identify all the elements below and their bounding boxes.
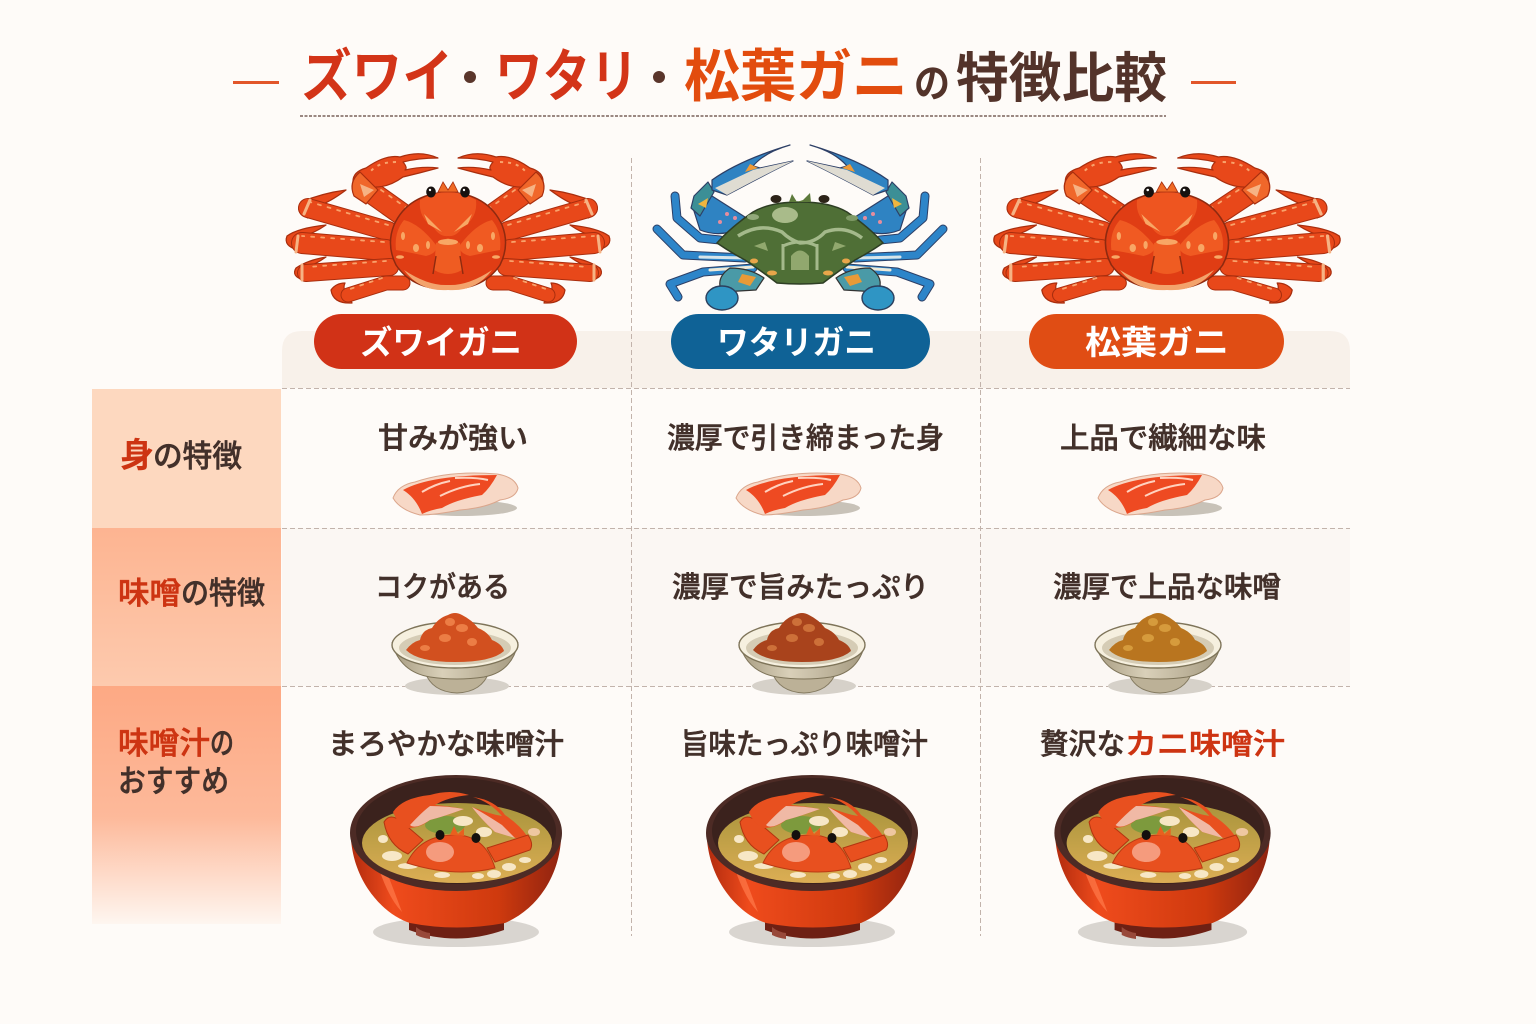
title dot 2 — [653, 71, 665, 83]
row header: miso: の特徴 — [181, 576, 265, 611]
icon: crab meat watari — [736, 473, 861, 516]
cell text: meat zuwai: 甘みが強い — [378, 422, 528, 455]
title word: watari: ワタリ — [495, 45, 638, 109]
title word: comparison: 特徴比較 — [956, 49, 1167, 109]
row header: meat: 身 — [120, 437, 154, 475]
cell text: soup zuwai: まろやかな味噌汁 — [328, 728, 564, 761]
icon: crab meat zuwai — [393, 473, 518, 516]
icon: miso dish zuwai — [392, 613, 518, 695]
cell text: miso matsuba: 濃厚で上品な味噌 — [1053, 571, 1281, 604]
row header: miso soup: の — [210, 726, 234, 761]
cell text: miso watari: 濃厚で旨みたっぷり — [672, 571, 929, 604]
name pill: matsuba — [1029, 314, 1284, 369]
icon: crab meat matsuba — [1098, 473, 1223, 516]
cell text: meat watari: 濃厚で引き締まった身 — [667, 422, 944, 455]
row header: miso soup: おすすめ — [118, 764, 229, 799]
icon: crab miso soup bowl zuwai — [350, 775, 562, 947]
title dot 1 — [464, 71, 476, 83]
dividers — [282, 158, 1350, 936]
row band: miso — [282, 528, 1350, 686]
name pill: watari — [671, 314, 930, 369]
icon: matsuba crab — [994, 154, 1340, 303]
row header: meat — [92, 389, 281, 528]
name pill: zuwai — [314, 314, 577, 369]
cell text: miso zuwai: コクがある — [375, 571, 510, 604]
icon: miso dish matsuba — [1095, 613, 1221, 695]
icon: crab miso soup bowl watari — [706, 775, 918, 947]
title underline — [300, 115, 1166, 117]
name pill: matsuba: 松葉ガニ — [1085, 324, 1229, 361]
icon: crab miso soup bowl matsuba — [1054, 775, 1271, 947]
cell text: soup watari: 旨味たっぷり味噌汁 — [681, 728, 928, 761]
row header: miso: 味噌 — [118, 576, 181, 611]
title word: zuwai: ズワイ — [301, 45, 453, 109]
icon: miso dish watari — [739, 613, 865, 695]
row header: meat: の特徴 — [153, 439, 242, 474]
row header: miso soup: 味噌汁 — [118, 726, 210, 761]
row header: miso — [92, 528, 281, 686]
title word: matsuba: 松葉ガニ — [684, 45, 908, 109]
name pill: zuwai: ズワイガニ — [360, 324, 522, 361]
title — [233, 45, 1236, 116]
cell text: soup matsuba crab miso: カニ味噌汁 — [1125, 728, 1285, 761]
title dash right — [1191, 81, 1236, 84]
cell text: soup matsuba luxury: 贅沢な — [1040, 728, 1125, 761]
table band — [282, 331, 1350, 388]
name pill: watari: ワタリガニ — [717, 324, 876, 361]
title particle: の — [914, 62, 950, 106]
row header: miso soup — [92, 686, 281, 924]
icon: snow crab — [286, 154, 610, 303]
icon: blue swimming crab — [657, 145, 943, 310]
cell text: meat matsuba: 上品で繊細な味 — [1060, 422, 1266, 455]
title dash left — [233, 81, 279, 84]
